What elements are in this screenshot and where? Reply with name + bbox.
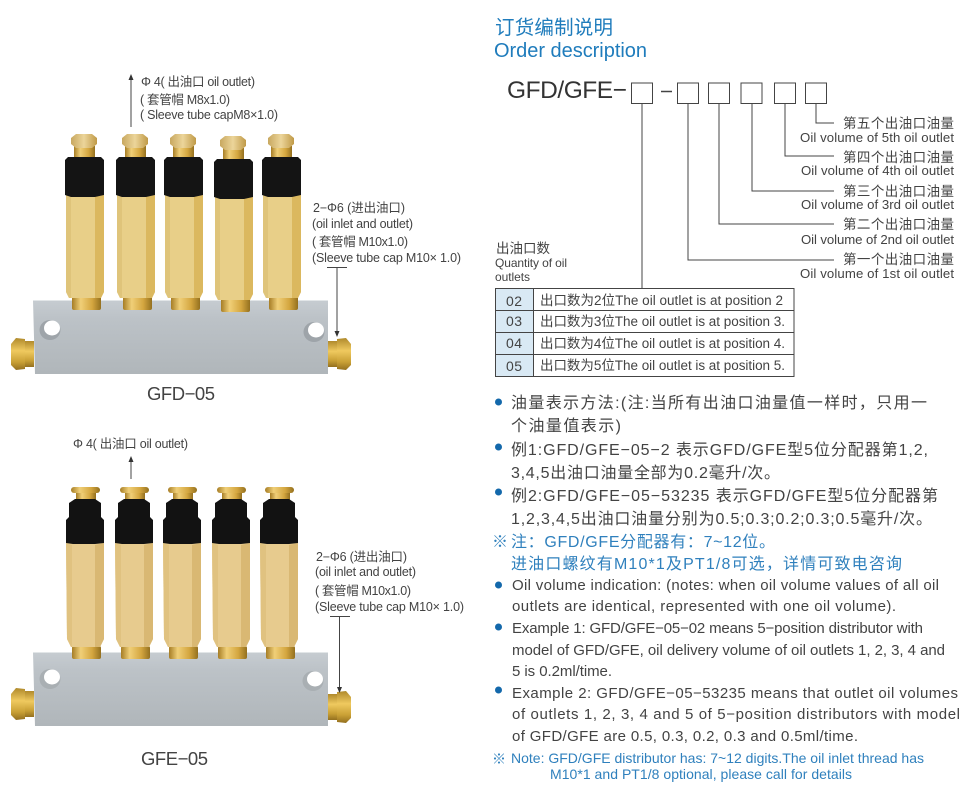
label: GFD inlet: 2−Φ6 (进出油口) [313,201,405,215]
note: example 1: model of GFD/GFE, oil delivery volume of oil outlets 1, 2, 3, 4 and [512,642,945,659]
quantity label: outlets [495,270,530,284]
manifold block [33,652,328,726]
quantity label [495,241,567,284]
caption: GFE-05: GFE−05 [141,748,208,769]
outlet volume labels: Oil volume of 3rd oil outlet [801,197,954,212]
note: blue remark [492,750,924,782]
heading: order description [494,17,647,62]
note: example 1 [495,441,928,482]
quantity table: 出口数为2位The oil outlet is at position 2 [540,293,783,308]
label: GFE outlet: Φ 4( 出油口 oil outlet) [73,437,188,451]
note: example 1: 3,4,5出油口油量全部为0.2毫升/次。 [511,463,780,482]
label: GFE inlet: 2−Φ6 (进出油口) [316,550,407,564]
note: blue remark: Note: GFD/GFE distributor has: 7~12 digits.The oil inlet thread has [511,750,924,766]
notes: Chinese [492,394,938,573]
heading: order description: Order description [494,40,647,62]
label: GFD outlet: ( 套管帽 M8x1.0) [140,92,230,107]
note: example 2: Example 2: GFD/GFE−05−53235 means that outlet oil volumes [512,685,958,702]
outlet volume labels: Oil volume of 1st oil outlet [800,266,954,281]
model code: GFD/GFE− [507,77,627,104]
order code diagram [495,77,954,376]
label: GFE inlet: (oil inlet and outlet) [315,565,416,579]
note: volume indication: 油量表示方法:(注:当所有出油口油量值一样时，只用一 [511,394,927,412]
quantity table: 出口数为4位The oil outlet is at position 4. [540,336,785,351]
outlet volume labels: 第三个出油口油量 [843,183,954,199]
outlet volume labels: 第四个出油口油量 [843,149,954,165]
note: blue remark: ※ [492,751,506,767]
note: example 1: 例1:GFD/GFE−05−2 表示GFD/GFE型5位分配器第1,2, [511,441,928,459]
arrow: inlet GFD [327,267,347,337]
label: GFE inlet: ( 套管帽 M10x1.0) [315,583,411,598]
note: volume indication: Oil volume indication: (notes: when oil volume values of all oil [512,577,939,594]
quantity table: 02 [506,293,522,309]
arrow: outlet GFE [128,456,134,479]
note: blue remark: 注：GFD/GFE分配器有：7~12位。 [511,533,775,551]
note: blue remark [492,533,902,573]
label: GFE inlet [315,550,464,614]
label: GFD inlet: (Sleeve tube cap M10× 1.0) [312,251,461,265]
connector lines [642,104,834,288]
note: volume indication: outlets are identical, represented with one oil volume). [512,598,896,615]
quantity label: 出油口数 [496,241,550,256]
outlet volume labels: Oil volume of 4th oil outlet [801,163,954,178]
note: example 1: 5 is 0.2ml/time. [512,663,612,680]
note: example 2: 例2:GFD/GFE−05−53235 表示GFD/GFE型5位分配器第 [511,487,938,505]
quantity table: 出口数为5位The oil outlet is at position 5. [540,358,785,373]
arrow: inlet GFE [330,616,350,693]
quantity label: Quantity of oil [495,256,567,270]
arrow: outlet GFD [128,74,134,127]
note: volume indication [495,394,927,435]
label: GFD inlet: (oil inlet and outlet) [312,217,413,231]
note: blue remark: M10*1 and PT1/8 optional, please call for details [550,766,852,782]
label: GFE inlet: (Sleeve tube cap M10× 1.0) [315,600,464,614]
note: blue remark: 进油口螺纹有M10*1及PT1/8可选，详情可致电咨询 [511,555,902,573]
outlet volume labels: Oil volume of 2nd oil outlet [801,232,954,247]
inlet fittings [11,688,351,723]
note: volume indication [495,577,939,615]
notes: English [492,577,960,782]
label: GFD outlet: ( Sleeve tube capM8×1.0) [140,108,278,122]
five metering valves [66,487,298,659]
five metering valves [65,134,301,312]
note: example 2 [495,487,938,528]
note: volume indication: 个油量值表示) [511,417,621,435]
quantity table: 05 [506,358,522,374]
note: example 2: of outlets 1, 2, 3, 4 and 5 of 5−position distributors with model [512,706,960,723]
note: example 1 [495,620,945,680]
note: example 2: of GFD/GFE are 0.5, 0.3, 0.2, 0.3 and 0.5ml/time. [512,728,858,745]
outlet volume labels: 第二个出油口油量 [843,216,954,232]
note: example 2: 1,2,3,4,5出油口油量分别为0.5;0.3;0.2;0.3;0.5毫升/次。 [511,509,932,528]
product: GFE-05 distributor [11,487,351,726]
note: example 2 [495,685,960,745]
outlet volume labels [800,115,954,281]
quantity table: 出口数为3位The oil outlet is at position 3. [540,314,785,329]
outlet volume labels: 第一个出油口油量 [843,251,954,267]
outlet volume labels: 第五个出油口油量 [843,115,954,131]
label: GFD inlet [312,201,461,265]
quantity table [496,288,794,376]
manifold block [33,300,328,374]
caption: GFD-05: GFD−05 [147,383,215,404]
heading: order description: 订货编制说明 [495,17,613,39]
label: GFD inlet: ( 套管帽 M10x1.0) [312,234,408,249]
note: blue remark: ※ [492,534,508,551]
quantity table: 03 [506,313,522,329]
label: GFD outlet: Φ 4( 出油口 oil outlet) [141,75,255,89]
note: example 1: Example 1: GFD/GFE−05−02 means 5−position distributor with [512,620,923,637]
code boxes [632,83,826,104]
outlet volume labels: Oil volume of 5th oil outlet [800,130,954,145]
label: GFD outlet [140,75,278,122]
quantity table: 04 [506,335,522,351]
product: GFD-05 distributor [11,134,351,374]
inlet fittings [11,338,351,370]
